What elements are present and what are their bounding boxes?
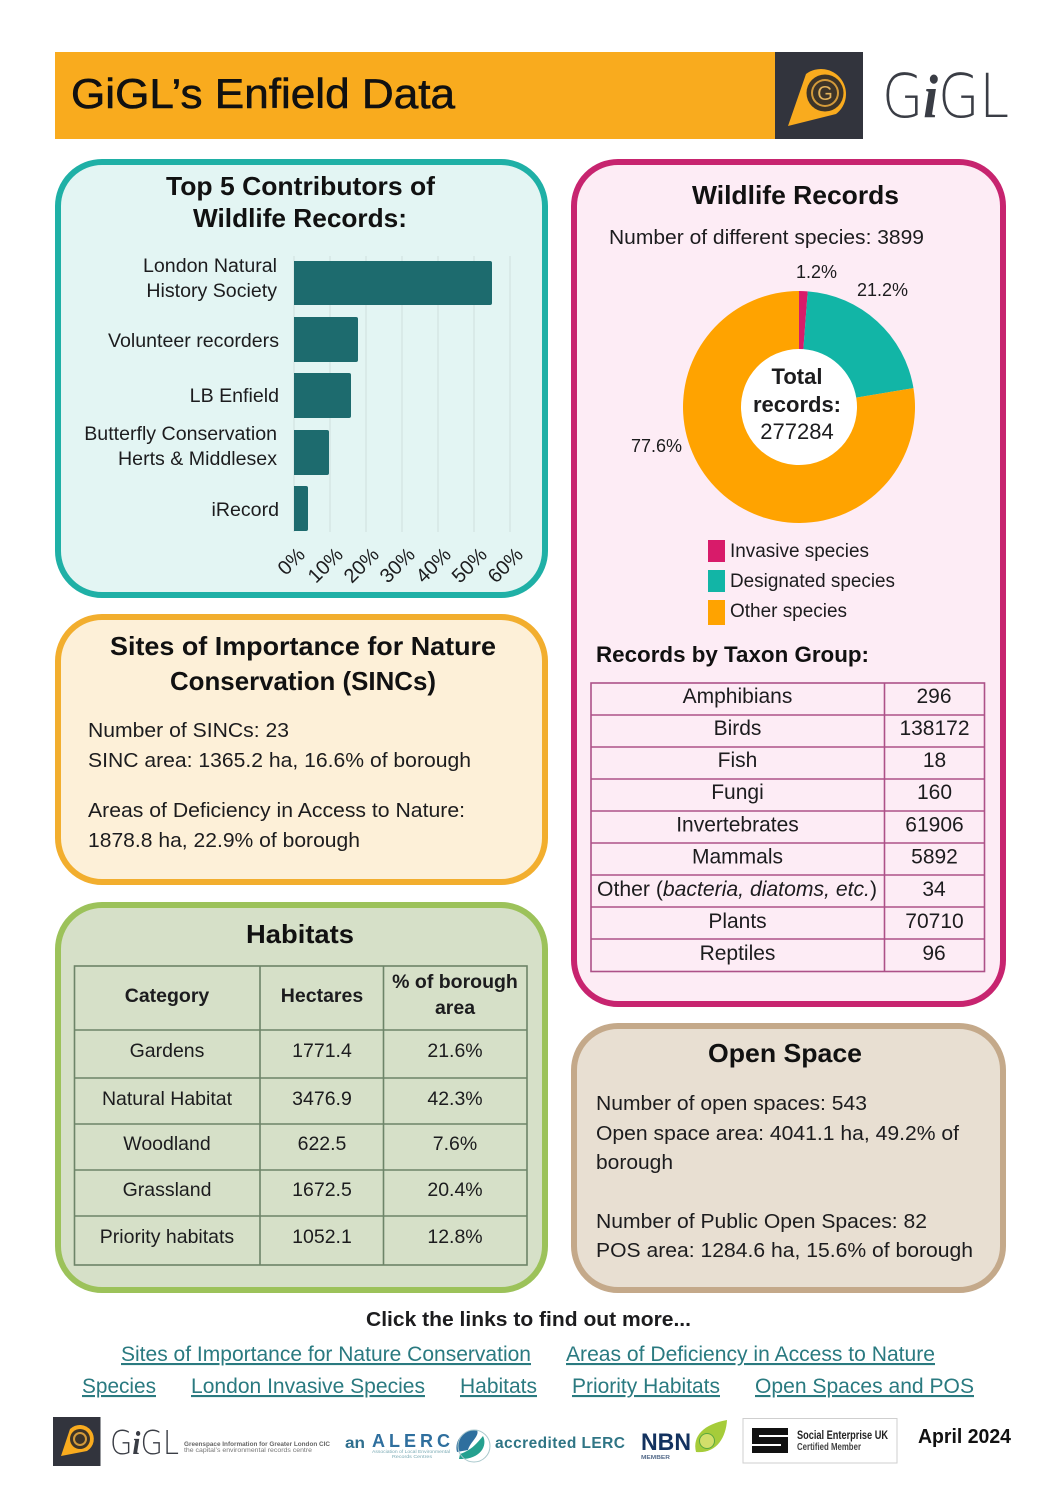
heading: SINCs: Conservation (SINCs) bbox=[170, 666, 436, 696]
table: taxon groups: Birds bbox=[714, 717, 761, 740]
table: taxon groups: Amphibians bbox=[683, 685, 792, 708]
logo: Social Enterprise UK bbox=[743, 1418, 897, 1463]
bar chart: contributors bbox=[84, 255, 528, 588]
table: taxon groups: 5892 bbox=[911, 846, 958, 868]
donut centre label: records: bbox=[753, 392, 841, 417]
table: habitats: Natural Habitat bbox=[102, 1088, 233, 1110]
bar: iRecord bbox=[211, 486, 308, 531]
table: taxon groups: 138172 bbox=[899, 717, 970, 740]
text: open space statistics: Open space area: 4041.1 ha, 49.2% of bbox=[596, 1122, 959, 1145]
table: taxon groups: 34 bbox=[922, 878, 946, 901]
table: taxon groups: 160 bbox=[917, 781, 952, 804]
bar: London Natural History Society bbox=[143, 255, 492, 305]
donut centre label bbox=[753, 364, 841, 444]
table: habitats bbox=[74, 966, 527, 1265]
links prompt: Click the links to find out more... bbox=[366, 1309, 691, 1331]
donut chart: records by species type: 77.6% bbox=[631, 436, 682, 456]
table: habitats: 1672.5 bbox=[292, 1179, 352, 1201]
table: taxon groups: 70710 bbox=[905, 910, 964, 933]
bar: iRecord: iRecord bbox=[211, 499, 279, 521]
table: habitats: 7.6% bbox=[433, 1133, 477, 1155]
logo: GiGL footer: the capital’s environmental records centre bbox=[184, 1448, 313, 1454]
table: habitats: 3476.9 bbox=[292, 1088, 352, 1110]
table: taxon groups: Mammals bbox=[692, 846, 783, 868]
text: SINC statistics: Number of SINCs: 23 bbox=[88, 719, 289, 742]
donut centre label: Total bbox=[772, 364, 822, 389]
text: open space statistics: POS area: 1284.6 ha, 15.6% of borough bbox=[596, 1239, 973, 1262]
logo: ALERC accredited LERC: an bbox=[345, 1435, 365, 1452]
footer logos bbox=[53, 1417, 1012, 1466]
donut chart: records by species type: 1.2% bbox=[796, 262, 837, 282]
table: habitats: Category bbox=[125, 985, 209, 1007]
table: habitats: 1052.1 bbox=[292, 1226, 352, 1248]
logo: ALERC accredited LERC: accredited LERC bbox=[495, 1435, 625, 1452]
text: open space statistics: Number of Public Open Spaces: 82 bbox=[596, 1210, 927, 1233]
links: Habitats bbox=[460, 1375, 537, 1398]
table: habitats: 1771.4 bbox=[292, 1040, 352, 1062]
bar: LB Enfield: LB Enfield bbox=[190, 385, 279, 407]
text: open space statistics: Number of open spaces: 543 bbox=[596, 1092, 867, 1115]
table: habitats: area bbox=[435, 997, 475, 1019]
text: SINC statistics bbox=[88, 719, 471, 852]
table: taxon groups: Plants bbox=[708, 910, 767, 933]
bar: Volunteer recorders: Volunteer recorders bbox=[108, 330, 279, 352]
logo: NBN member: MEMBER bbox=[641, 1455, 670, 1461]
donut centre label: 277284 bbox=[760, 419, 834, 444]
table: habitats: 12.8% bbox=[427, 1226, 483, 1248]
table: taxon groups bbox=[591, 683, 984, 972]
logo: Social Enterprise UK: Social Enterprise UK bbox=[797, 1428, 888, 1442]
heading: records by taxon group: Records by Taxon Group: bbox=[596, 642, 869, 667]
date: April 2024 bbox=[918, 1426, 1012, 1448]
x axis labels: 10% bbox=[304, 544, 348, 588]
bar: LB Enfield bbox=[190, 373, 351, 418]
logo: ALERC accredited LERC: ALERC bbox=[372, 1431, 450, 1451]
table: habitats: 622.5 bbox=[298, 1133, 347, 1155]
legend: species type: Designated species bbox=[730, 571, 895, 592]
heading: habitats: Habitats bbox=[246, 919, 354, 949]
links bbox=[82, 1343, 974, 1398]
panel: open space bbox=[574, 1026, 1003, 1290]
text: SINC statistics: SINC area: 1365.2 ha, 16.6% of borough bbox=[88, 749, 471, 772]
x axis labels: 60% bbox=[484, 544, 528, 588]
text: SINC statistics: Areas of Deficiency in Access to Nature: bbox=[88, 799, 465, 822]
links: Sites of Importance for Nature Conservation bbox=[121, 1343, 531, 1366]
legend: species type: Other species bbox=[730, 601, 847, 622]
links: Species bbox=[82, 1375, 156, 1398]
table: taxon groups: Fungi bbox=[711, 781, 764, 804]
logo: NBN member bbox=[641, 1420, 727, 1461]
donut chart: records by species type: 21.2% bbox=[857, 280, 908, 300]
legend: species type bbox=[708, 540, 895, 625]
table: habitats: Hectares bbox=[281, 985, 363, 1007]
table: habitats: 42.3% bbox=[427, 1088, 483, 1110]
text: species count: Number of different species: 3899 bbox=[609, 226, 924, 249]
panel: habitats bbox=[58, 905, 545, 1290]
heading: SINCs: Sites of Importance for Nature bbox=[110, 631, 496, 661]
links: Open Spaces and POS bbox=[755, 1375, 974, 1398]
logo: GiGL footer: GiGL bbox=[110, 1423, 179, 1462]
x axis labels bbox=[274, 544, 528, 588]
bar: Butterfly Conservation: Herts & Middlesex bbox=[118, 448, 277, 470]
heading: open space: Open Space bbox=[708, 1038, 862, 1068]
table: habitats: Priority habitats bbox=[100, 1226, 234, 1248]
table: habitats: 21.6% bbox=[427, 1040, 483, 1062]
x axis labels: 40% bbox=[412, 544, 456, 588]
panel: wildlife records bbox=[574, 162, 1003, 1004]
panel: top 5 contributors bbox=[58, 162, 545, 595]
table: taxon groups: Invertebrates bbox=[676, 814, 799, 836]
table: taxon groups: 61906 bbox=[905, 814, 964, 836]
text: open space statistics: borough bbox=[596, 1151, 673, 1174]
x axis labels: 30% bbox=[376, 544, 420, 588]
table: taxon groups: Reptiles bbox=[700, 942, 775, 965]
logo: ALERC accredited LERC: Association of Local Environmental bbox=[372, 1449, 450, 1454]
logo: ALERC accredited LERC bbox=[345, 1430, 625, 1462]
heading: wildlife records: Wildlife Records bbox=[692, 180, 899, 210]
donut chart: records by species type bbox=[631, 262, 915, 523]
logo: GiGL footer bbox=[53, 1417, 330, 1466]
title: GiGL’s Enfield Data bbox=[71, 70, 456, 117]
table: taxon groups: 96 bbox=[922, 942, 946, 965]
bar: London Natural History Society: London Natural bbox=[143, 255, 277, 277]
panel: SINCs bbox=[58, 617, 545, 882]
text: open space statistics bbox=[596, 1092, 973, 1262]
logo: Social Enterprise UK: Certified Member bbox=[797, 1442, 861, 1453]
heading: SINCs bbox=[110, 631, 496, 696]
logo: GiGL footer: Greenspace Information for Greater London CIC bbox=[184, 1441, 330, 1448]
table: taxon groups: 18 bbox=[923, 749, 946, 772]
heading: top 5 contributors: Wildlife Records: bbox=[193, 203, 407, 233]
header banner bbox=[55, 52, 1009, 139]
heading: top 5 contributors bbox=[166, 171, 435, 233]
table: habitats: 20.4% bbox=[427, 1179, 483, 1201]
table: habitats: Gardens bbox=[130, 1040, 205, 1062]
bar: Volunteer recorders bbox=[108, 317, 358, 362]
logo: ALERC accredited LERC: Records Centres bbox=[392, 1454, 433, 1459]
bar: Butterfly Conservation: Butterfly Conservation bbox=[84, 423, 277, 445]
bar: Butterfly Conservation bbox=[84, 423, 329, 475]
x axis labels: 50% bbox=[448, 544, 492, 588]
logo wordmark: GiGL: GiGL bbox=[882, 61, 1009, 132]
table: taxon groups: Other (bacteria, diatoms, etc.) bbox=[597, 878, 877, 901]
links: Priority Habitats bbox=[572, 1375, 720, 1398]
logo: NBN member: NBN bbox=[641, 1429, 691, 1456]
bar: London Natural History Society: History Society bbox=[146, 280, 277, 302]
table: habitats: Woodland bbox=[123, 1133, 211, 1155]
links: London Invasive Species bbox=[191, 1375, 425, 1398]
links: Areas of Deficiency in Access to Nature bbox=[566, 1343, 935, 1366]
text: SINC statistics: 1878.8 ha, 22.9% of borough bbox=[88, 829, 360, 852]
heading: top 5 contributors: Top 5 Contributors of bbox=[166, 171, 435, 201]
table: habitats: % of borough bbox=[392, 971, 518, 993]
x axis labels: 0% bbox=[274, 544, 310, 580]
legend: species type: Invasive species bbox=[730, 541, 869, 562]
table: habitats: Grassland bbox=[123, 1179, 211, 1201]
icon: GiGL map pin logo: G bbox=[817, 83, 833, 105]
table: taxon groups: Fish bbox=[718, 749, 757, 772]
table: taxon groups: 296 bbox=[916, 685, 952, 708]
x axis labels: 20% bbox=[340, 544, 384, 588]
icon: GiGL map pin logo bbox=[775, 52, 863, 139]
